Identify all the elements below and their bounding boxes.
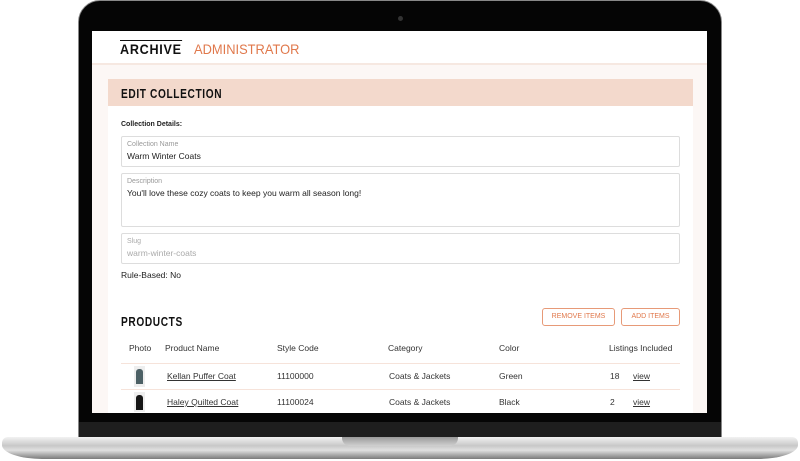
button: add items xyxy=(621,308,680,326)
table row 1: 11100000 xyxy=(277,371,314,381)
table row 2 xyxy=(134,392,650,412)
icon: coat photo green xyxy=(134,366,145,387)
input: description: You'll love these cozy coats to keep you warm all season long! xyxy=(127,188,361,198)
text: Style Code xyxy=(277,343,319,353)
input: collection name: Warm Winter Coats xyxy=(127,151,201,161)
panel: edit collection xyxy=(108,79,693,419)
button: remove items xyxy=(542,308,615,326)
heading bar xyxy=(108,79,693,106)
table row 2: Black xyxy=(499,397,520,407)
text: Category xyxy=(388,343,422,353)
heading: products: PRODUCTS xyxy=(121,314,183,329)
input: description: Description xyxy=(127,178,162,185)
table row 2: 11100024 xyxy=(277,397,314,407)
table header xyxy=(129,343,672,353)
table row 2: 2 xyxy=(610,397,615,407)
screen xyxy=(92,31,707,413)
lower bezel xyxy=(79,422,721,440)
table row 1 xyxy=(134,366,650,387)
input: slug xyxy=(121,233,680,264)
heading bar: EDIT COLLECTION xyxy=(121,86,222,101)
icon: camera xyxy=(398,16,403,21)
text: Product Name xyxy=(165,343,219,353)
logo ARCHIVE: ARCHIVE xyxy=(120,41,182,57)
input: collection name: Collection Name xyxy=(127,141,178,148)
table row 1: Green xyxy=(499,371,523,381)
input: slug: warm-winter-coats xyxy=(127,248,196,258)
input: slug: Slug xyxy=(127,238,141,245)
text: Listings Included xyxy=(609,343,672,353)
table row 1: Kellan Puffer Coat xyxy=(167,371,236,381)
table row 1: Coats & Jackets xyxy=(389,371,450,381)
ADMINISTRATOR label: ADMINISTRATOR xyxy=(194,41,299,57)
laptop base xyxy=(2,437,798,459)
icon: coat photo black xyxy=(134,392,145,412)
text: collection details: Collection Details: xyxy=(121,121,182,128)
laptop lid xyxy=(78,0,722,440)
header bar xyxy=(92,31,707,65)
button: remove items: REMOVE ITEMS xyxy=(552,313,605,320)
base notch xyxy=(342,437,458,446)
table row 2: view xyxy=(633,397,650,407)
table row 2: Coats & Jackets xyxy=(389,397,450,407)
table row 1: view xyxy=(633,371,650,381)
text: Photo xyxy=(129,343,151,353)
input: collection name xyxy=(121,136,680,167)
table row 2: Haley Quilted Coat xyxy=(167,397,238,407)
table row 1: 18 xyxy=(610,371,619,381)
text: rule-based: Rule-Based: No xyxy=(121,270,181,280)
input: description xyxy=(121,173,680,227)
text: Color xyxy=(499,343,519,353)
button: add items: ADD ITEMS xyxy=(631,313,670,320)
